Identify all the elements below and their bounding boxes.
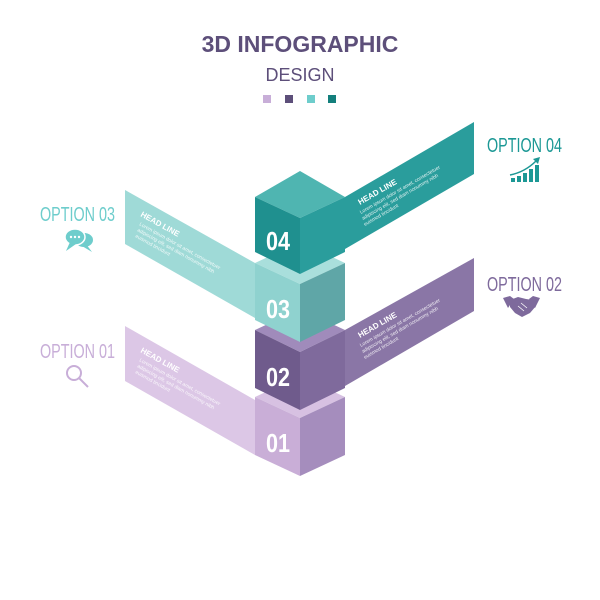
title: 3D INFOGRAPHIC bbox=[202, 31, 398, 57]
ribbon 01: euismod tincidunt bbox=[134, 370, 172, 394]
ribbon 03 bbox=[125, 190, 255, 318]
cube 02 bbox=[255, 309, 345, 410]
ribbon 04: adipiscing elit, sed diam nonummy nibh bbox=[361, 173, 440, 222]
label: option 01: OPTION 01 bbox=[40, 341, 115, 363]
ribbon 04 bbox=[345, 122, 474, 249]
ribbon 04: HEAD LINE bbox=[356, 177, 399, 207]
label: option 04: OPTION 04 bbox=[487, 135, 562, 157]
icon: handshake bbox=[503, 296, 540, 317]
cube 01: 01 bbox=[266, 428, 290, 458]
icon: growth chart bbox=[510, 157, 540, 182]
ribbon 01: adipiscing elit, sed diam nonummy nibh bbox=[136, 364, 215, 411]
cube 04: 04 bbox=[266, 226, 290, 256]
cube 02: 02 bbox=[266, 362, 290, 392]
ribbon 03: HEAD LINE bbox=[139, 210, 182, 239]
title: DESIGN bbox=[265, 65, 335, 85]
ribbon 02: Lorem ipsum dolor sit amet, consectetuer bbox=[359, 298, 442, 349]
ribbon 01 bbox=[125, 326, 255, 455]
cube 03: 03 bbox=[266, 294, 290, 324]
label: option 02: OPTION 02 bbox=[487, 274, 562, 296]
ribbon 02 bbox=[345, 258, 474, 386]
ribbon 02: adipiscing elit, sed diam nonummy nibh bbox=[361, 306, 440, 355]
ribbon 03: Lorem ipsum dolor sit amet, consectetuer bbox=[138, 222, 221, 271]
ribbon 04: euismod tincidunt bbox=[363, 203, 400, 228]
icon: search bbox=[67, 366, 88, 387]
cube 04 bbox=[255, 171, 345, 274]
ribbon 01: Lorem ipsum dolor sit amet, consectetuer bbox=[138, 358, 221, 407]
ribbon 03: adipiscing elit, sed diam nonummy nibh bbox=[136, 228, 215, 275]
ribbon 02: HEAD LINE bbox=[356, 310, 399, 340]
icon: chat bubbles bbox=[65, 229, 93, 252]
title bbox=[202, 31, 398, 85]
cube 01 bbox=[255, 376, 345, 476]
cube 03 bbox=[255, 242, 345, 342]
label: option 03: OPTION 03 bbox=[40, 204, 115, 226]
ribbon 02: euismod tincidunt bbox=[363, 336, 400, 361]
ribbon 04: Lorem ipsum dolor sit amet, consectetuer bbox=[359, 165, 442, 216]
color legend squares bbox=[263, 95, 336, 103]
ribbon 03: euismod tincidunt bbox=[134, 234, 172, 258]
ribbon 01: HEAD LINE bbox=[139, 346, 182, 375]
